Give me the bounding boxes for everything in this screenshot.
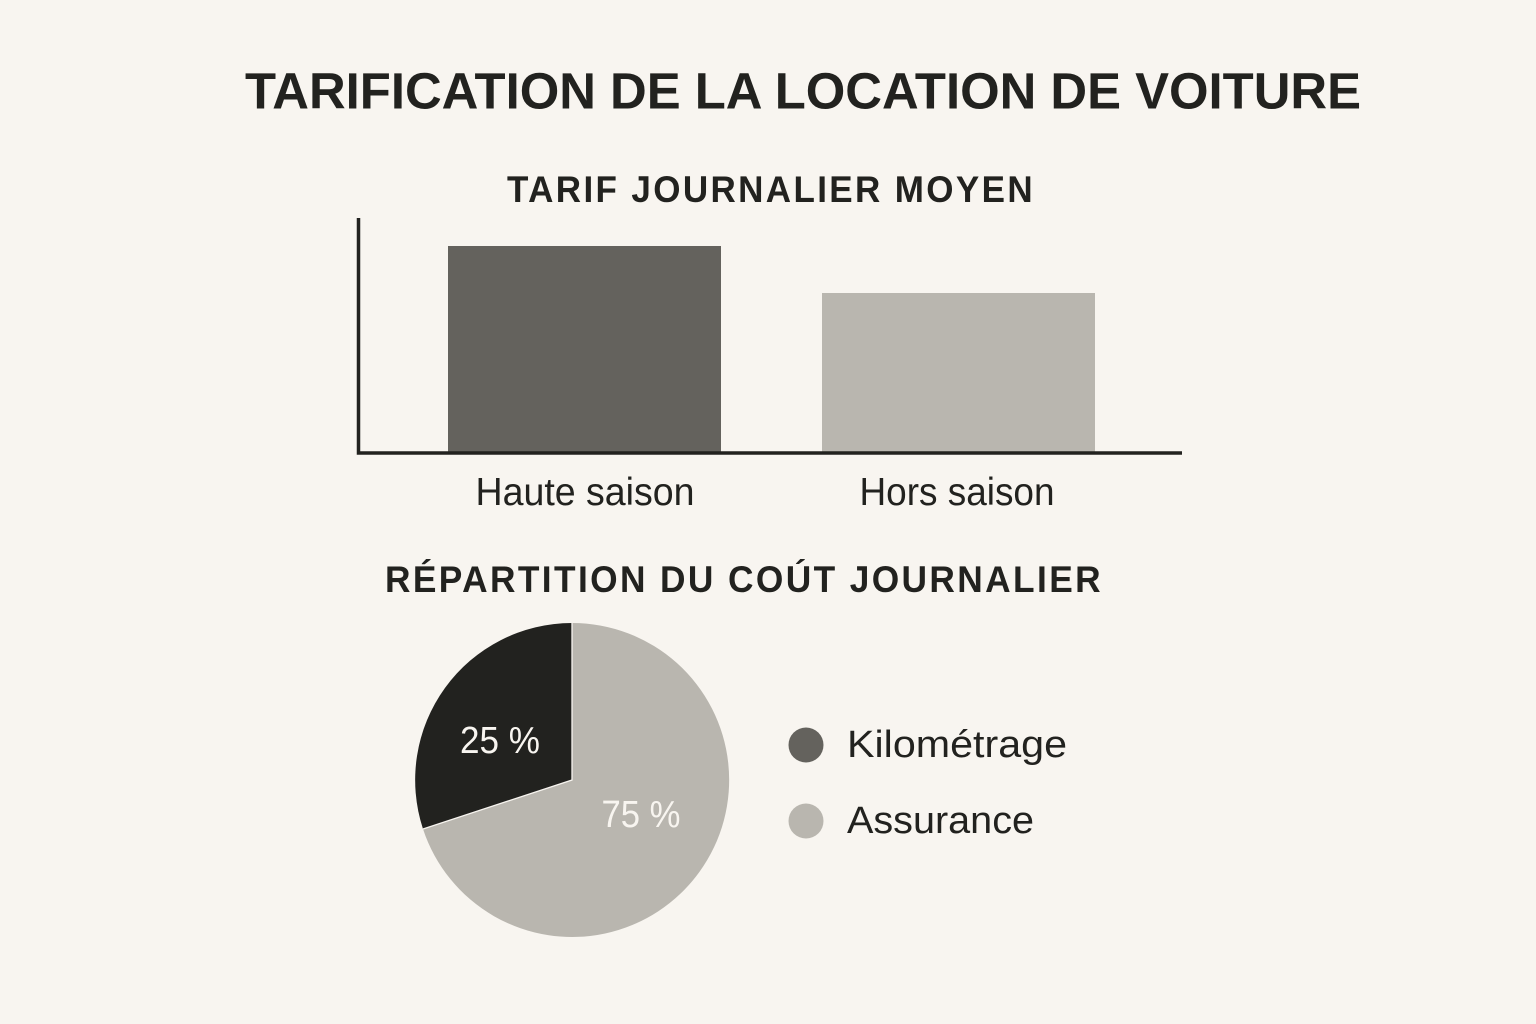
label: haute saison: Haute saison — [476, 471, 694, 514]
bar: hors saison — [822, 293, 1095, 452]
heading: pie chart: RÉPARTITION DU COÚT JOURNALIER — [385, 558, 1103, 600]
pie slice: assurance 75% — [423, 623, 729, 937]
bar chart: tarif journalier moyen — [358, 169, 1182, 514]
value: 25%: 25 % — [460, 720, 540, 762]
bar: haute saison — [448, 246, 721, 452]
legend label: kilométrage: Kilométrage — [847, 724, 1067, 766]
heading: bar chart: TARIF JOURNALIER MOYEN — [507, 169, 1035, 210]
legend marker: assurance — [788, 804, 824, 838]
pie section: répartition du coût journalier — [385, 558, 1103, 937]
legend — [788, 724, 1067, 842]
title: TARIFICATION DE LA LOCATION DE VOITURE — [245, 62, 1361, 120]
pie slice: kilométrage 25% — [415, 623, 572, 829]
legend label: assurance: Assurance — [847, 800, 1034, 842]
label: hors saison: Hors saison — [860, 471, 1054, 514]
slice divider — [423, 623, 572, 829]
value: 75%: 75 % — [602, 794, 680, 836]
chart axes — [358, 218, 1182, 453]
legend marker: kilométrage — [788, 728, 824, 762]
